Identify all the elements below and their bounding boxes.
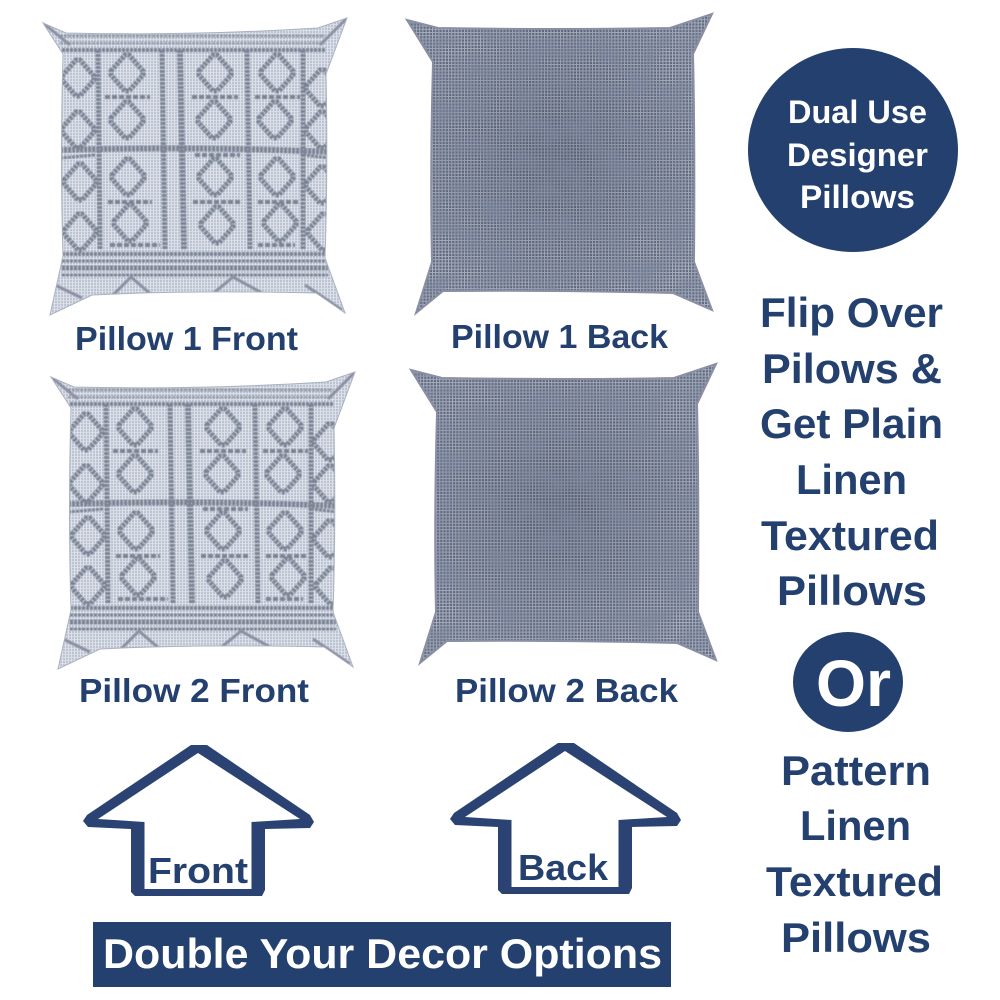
arrow: back	[450, 743, 681, 894]
label: pillow 2 front: Pillow 2 Front	[79, 672, 309, 709]
label: pillow 1 back: Pillow 1 Back	[451, 318, 669, 355]
arrow label: back: Back	[518, 847, 609, 888]
arrow label: front: Front	[148, 850, 248, 891]
badge: dual use designer pillows: Dual Use	[788, 94, 927, 130]
badge: dual use designer pillows: Pillows	[800, 179, 915, 215]
banner	[93, 922, 671, 987]
text block: pattern: Pattern	[781, 747, 931, 794]
label: pillow 2 back: Pillow 2 Back	[455, 672, 679, 709]
text block: flip over: Textured	[761, 512, 939, 559]
label: pillow 1 front: Pillow 1 Front	[75, 320, 298, 357]
pillow 2 back	[404, 360, 724, 670]
text block: flip over	[760, 289, 943, 614]
text block: flip over: Pillows	[777, 567, 927, 614]
text block: pattern: Linen	[800, 802, 911, 849]
text block: flip over: Linen	[796, 456, 907, 503]
text block: flip over: Pilows &	[762, 345, 942, 392]
text block: flip over: Get Plain	[760, 400, 943, 447]
badge: dual use designer pillows: Designer	[787, 137, 928, 173]
pillow 1 front	[43, 18, 347, 315]
banner: Double Your Decor Options	[103, 930, 662, 977]
text block: flip over: Flip Over	[760, 289, 943, 336]
arrow: front	[83, 745, 314, 896]
pillow 1 back	[400, 10, 720, 320]
text block: pattern: Pillows	[781, 914, 931, 961]
badge: or: Or	[816, 646, 891, 720]
badge: or	[793, 632, 903, 732]
text block: pattern	[766, 747, 943, 961]
text block: pattern: Textured	[766, 858, 943, 905]
pillow 2 front	[51, 372, 355, 669]
badge: dual use designer pillows	[748, 48, 958, 252]
